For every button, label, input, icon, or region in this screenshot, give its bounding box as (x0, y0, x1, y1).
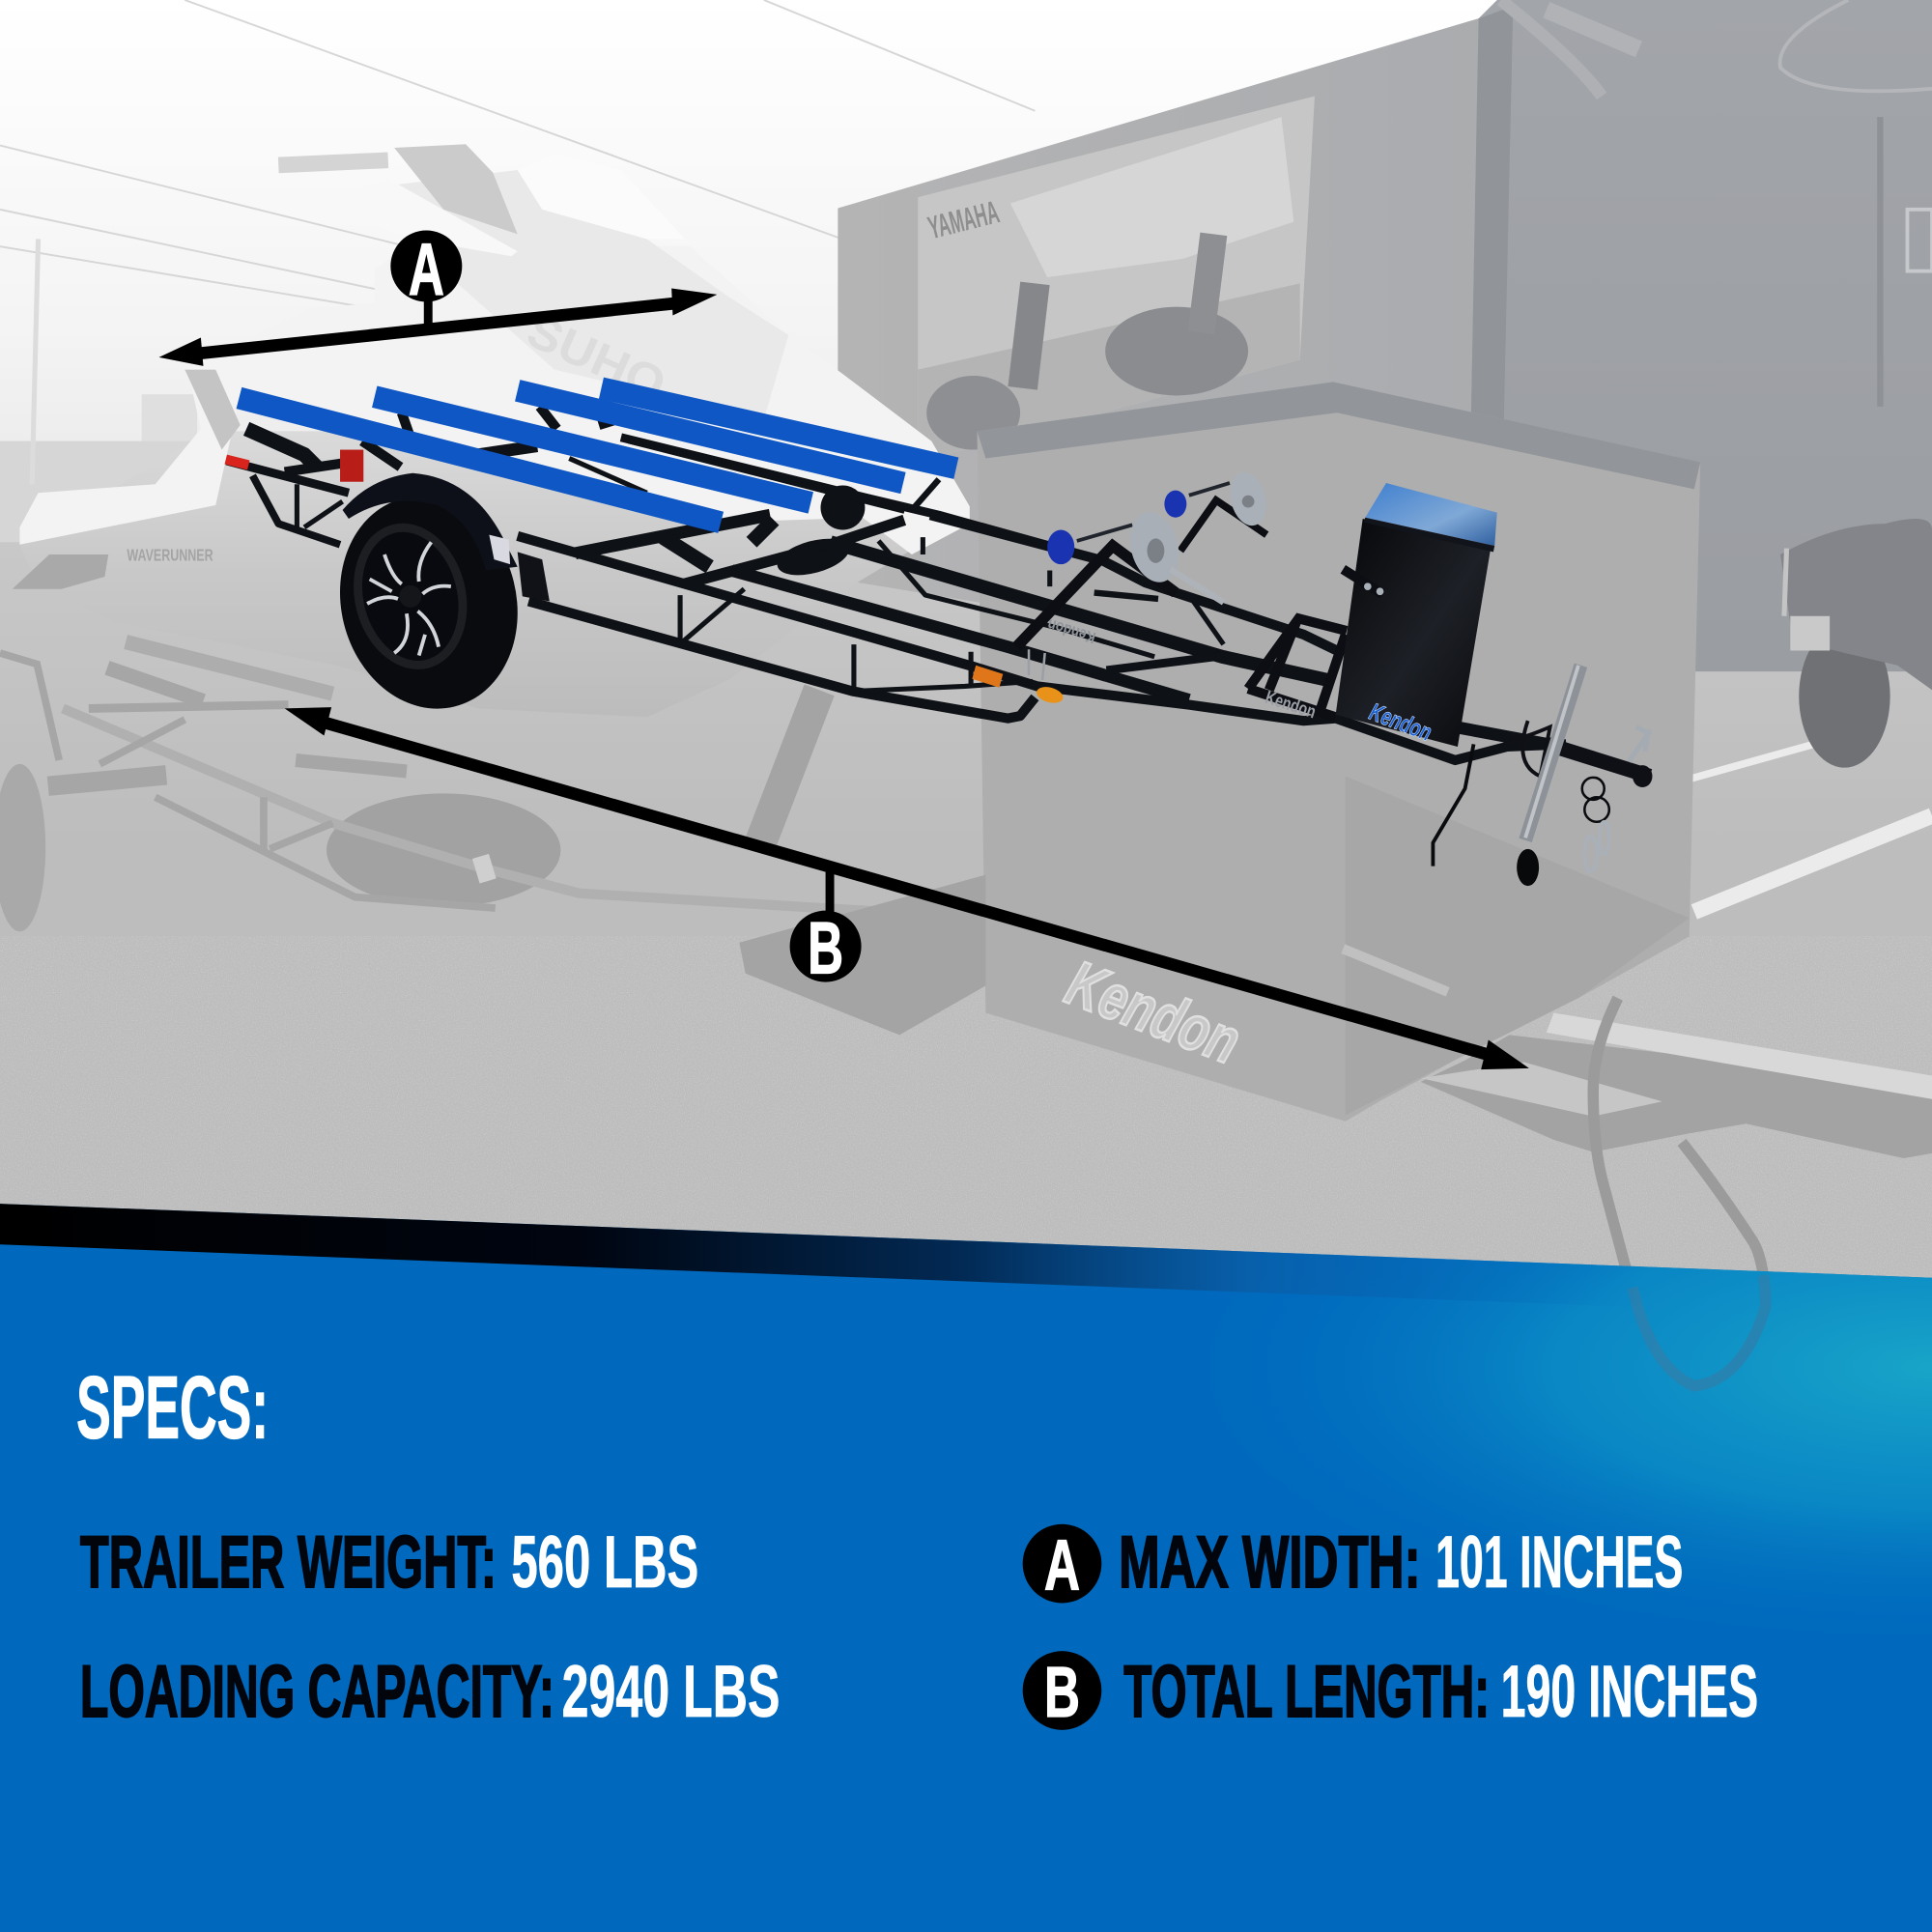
model label: SUHO (520, 304, 673, 412)
fender flag decal (489, 535, 510, 564)
lower hull (19, 431, 970, 717)
front rack (1248, 618, 1347, 723)
spec: max width: A (1044, 1524, 1080, 1605)
storage box (1336, 483, 1497, 747)
frame tubes (227, 407, 1566, 760)
blue bunk rails (239, 388, 956, 523)
spec: max width: 101 INCHES (1435, 1521, 1683, 1604)
spec: max width (1023, 1521, 1683, 1605)
fender (343, 473, 518, 571)
yamaha logo: YAMAHA (924, 194, 1003, 246)
sky (0, 0, 1932, 591)
building facade (838, 18, 1509, 690)
wire bundle (1509, 721, 1550, 777)
waverunner label: WAVERUNNER (127, 545, 213, 564)
spec: loading capacity: 2940 LBS (562, 1651, 780, 1733)
left console panel (343, 179, 518, 256)
right console panel (518, 154, 685, 239)
box logo: Kendon (1366, 698, 1435, 747)
power lines (0, 0, 1035, 308)
spec: total length: 190 INCHES (1501, 1651, 1758, 1733)
badge A: A (409, 229, 444, 311)
atv rider (1105, 307, 1248, 395)
spec: trailer weight: 560 LBS (511, 1521, 698, 1604)
upper hull (19, 242, 970, 554)
dark tower (1466, 0, 1932, 671)
tower graphic (1501, 0, 1932, 407)
tongue and coupler (1548, 727, 1652, 787)
power cord (1433, 744, 1474, 867)
spec: max width: MAX WIDTH: (1119, 1521, 1421, 1604)
rack label: Kendon (1263, 688, 1319, 723)
blue panel (0, 1204, 1932, 1932)
blue rollers (1047, 491, 1186, 564)
handlebar stem (394, 144, 518, 234)
handlebar grip (278, 160, 388, 165)
badge B: B (808, 908, 843, 990)
body neck (394, 170, 788, 419)
frame label: Kendon (1045, 615, 1097, 647)
seat back (185, 370, 241, 450)
motorcycle (1780, 519, 1932, 768)
ghost trailer (0, 642, 985, 1035)
ghost kendon logo: Kendon (1057, 948, 1249, 1078)
poster (918, 96, 1315, 462)
winch stands (1016, 483, 1266, 680)
rope through panel (1633, 1275, 1766, 1386)
wheel (318, 477, 540, 727)
rope loop (1593, 998, 1766, 1386)
distant buildings (0, 394, 210, 552)
ground (0, 542, 1932, 1293)
teal glow (0, 1204, 1932, 1932)
ghost tongue (1421, 1012, 1932, 1158)
winch discs (1123, 469, 1271, 603)
photo background (0, 0, 1932, 1386)
safety chains (1582, 778, 1609, 871)
spec: total length: TOTAL LENGTH: (1123, 1651, 1490, 1733)
spec: loading capacity: LOADING CAPACITY: (80, 1651, 554, 1733)
rear lights (225, 450, 1065, 705)
ghost box (977, 382, 1700, 1122)
jack post (1517, 666, 1580, 886)
parking lines (1690, 744, 1932, 912)
jet ski (13, 144, 970, 717)
asphalt grain (0, 936, 1932, 1293)
length arrow B (285, 707, 1529, 1069)
specs heading: SPECS: (76, 1359, 269, 1458)
gradient band (0, 1204, 1932, 1319)
trailer (225, 388, 1652, 886)
intake (13, 554, 108, 589)
motorbike rider (926, 376, 1020, 450)
width arrow A (159, 229, 717, 366)
hub bracket (518, 552, 550, 601)
spec: trailer weight: TRAILER WEIGHT: (80, 1521, 497, 1604)
lamp post (32, 239, 39, 484)
spec: total length: B (1044, 1652, 1080, 1732)
